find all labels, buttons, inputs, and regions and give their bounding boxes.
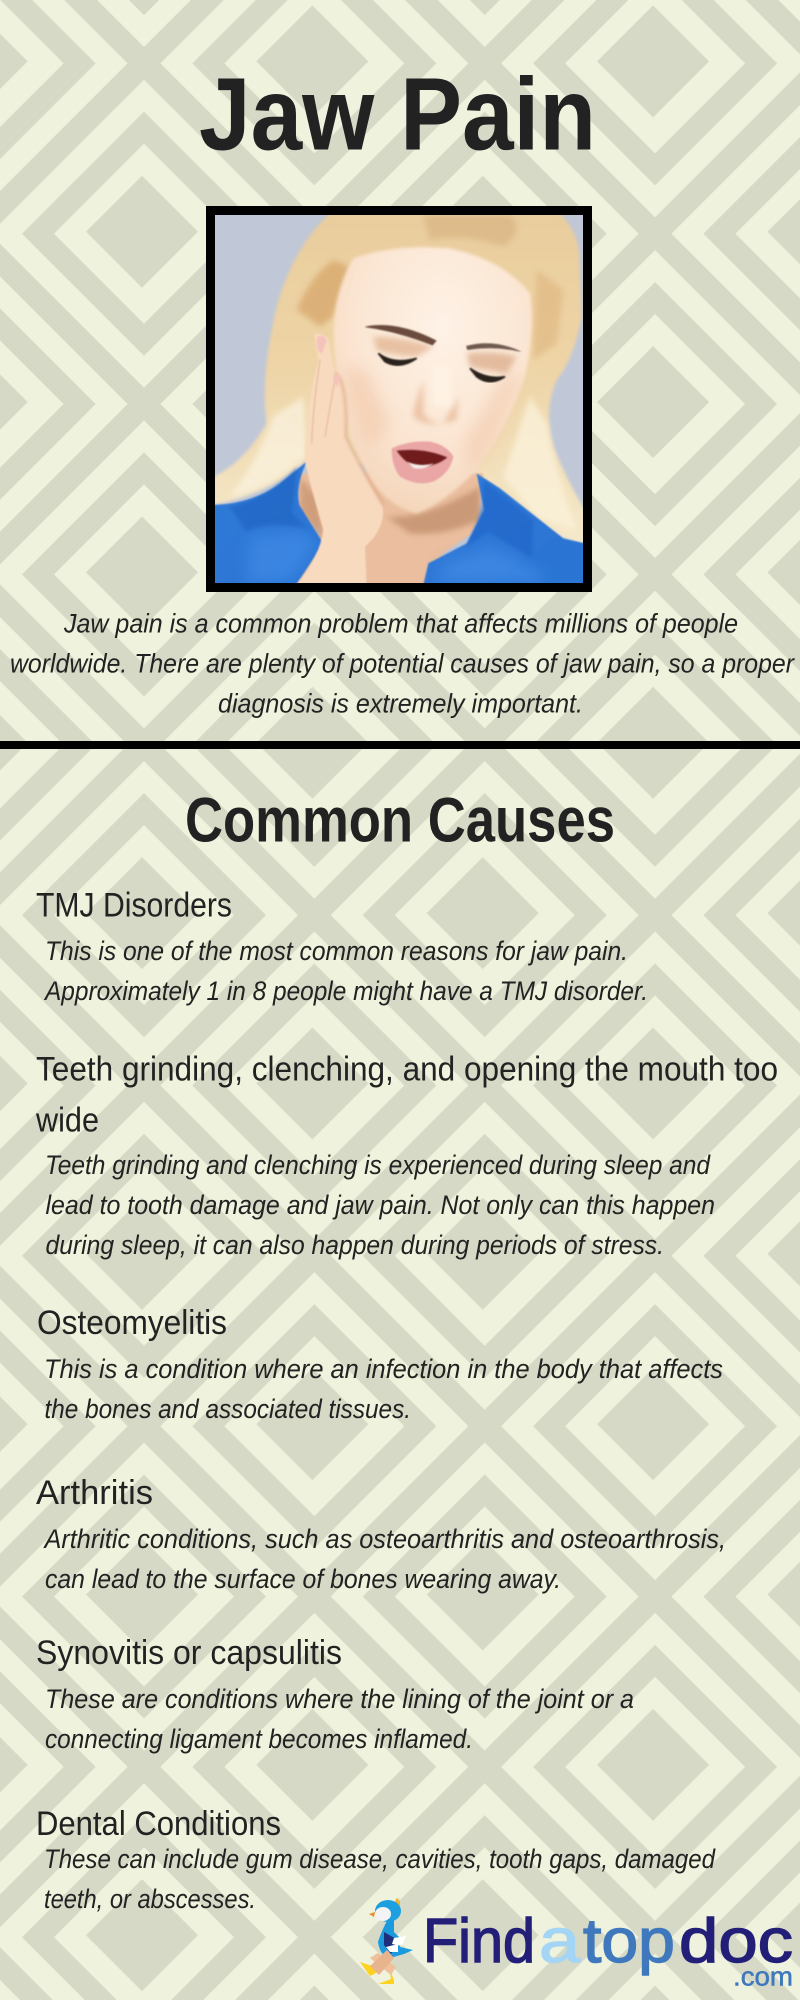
nose [413, 380, 458, 424]
cause: osteomyelitis [37, 1304, 723, 1424]
cause: teeth grinding [35, 1051, 778, 1260]
cause: synovitis or capsulitis: connecting ligament becomes inflamed. [45, 1724, 473, 1754]
cause: teeth grinding: wide [35, 1102, 99, 1140]
intro paragraph: Jaw pain is a common problem that affects millions of people [63, 608, 738, 638]
intro paragraph [10, 608, 795, 718]
cause: osteomyelitis: Osteomyelitis [37, 1304, 227, 1342]
cause: osteomyelitis: the bones and associated tissues. [44, 1394, 411, 1424]
icon: bird mascot with bandage [360, 1898, 413, 1984]
cause: TMJ disorders [36, 887, 648, 1006]
logo: Findatopdoc.com [360, 1898, 793, 1992]
wordmark: a [539, 1907, 581, 1976]
cause: osteomyelitis: This is a condition where an infection in the body that affects [44, 1354, 723, 1384]
hand [296, 333, 383, 585]
wordmark: Find [423, 1907, 535, 1976]
cause: TMJ disorders: TMJ Disorders [36, 887, 232, 925]
cause: TMJ disorders: Approximately 1 in 8 people might have a TMJ disorder. [43, 976, 648, 1006]
cause: synovitis or capsulitis [36, 1634, 634, 1754]
cause: synovitis or capsulitis: Synovitis or capsulitis [36, 1634, 342, 1672]
mouth [392, 441, 453, 483]
heading: common causes: Common Causes [185, 786, 615, 856]
cause: arthritis: Arthritis [36, 1474, 153, 1512]
cause: teeth grinding: lead to tooth damage and jaw pain. Not only can this happen [46, 1190, 715, 1220]
cause: teeth grinding: Teeth grinding and clenching is experienced during sleep and [45, 1150, 711, 1180]
eyes and brows [373, 337, 433, 357]
title: Jaw Pain [199, 56, 596, 172]
shirt right [423, 473, 585, 585]
cause: teeth grinding: during sleep, it can also happen during periods of stress. [46, 1230, 664, 1260]
cause: dental conditions: Dental Conditions [36, 1805, 281, 1843]
intro paragraph: diagnosis is extremely important. [218, 688, 583, 718]
wordmark: top [583, 1907, 675, 1976]
shirt left [213, 462, 323, 585]
wordmark [423, 1907, 793, 1992]
cause: dental conditions [36, 1805, 716, 1914]
cause: synovitis or capsulitis: These are conditions where the lining of the joint or a [45, 1684, 634, 1714]
photo: woman holding her jaw [206, 206, 592, 592]
divider line [0, 741, 800, 749]
cause: arthritis: can lead to the surface of bones wearing away. [45, 1564, 561, 1594]
cause: dental conditions: These can include gum disease, cavities, tooth gaps, damaged [44, 1844, 716, 1874]
wordmark: doc [679, 1907, 793, 1976]
neck [297, 473, 483, 585]
cause: TMJ disorders: This is one of the most common reasons for jaw pain. [45, 936, 628, 966]
cause: dental conditions: teeth, or abscesses. [44, 1884, 256, 1914]
cause: arthritis [36, 1474, 726, 1594]
hair [213, 213, 585, 547]
face [334, 247, 532, 513]
cause: arthritis: Arthritic conditions, such as osteoarthritis and osteoarthrosis, [43, 1524, 726, 1554]
wordmark: .com [733, 1962, 793, 1992]
